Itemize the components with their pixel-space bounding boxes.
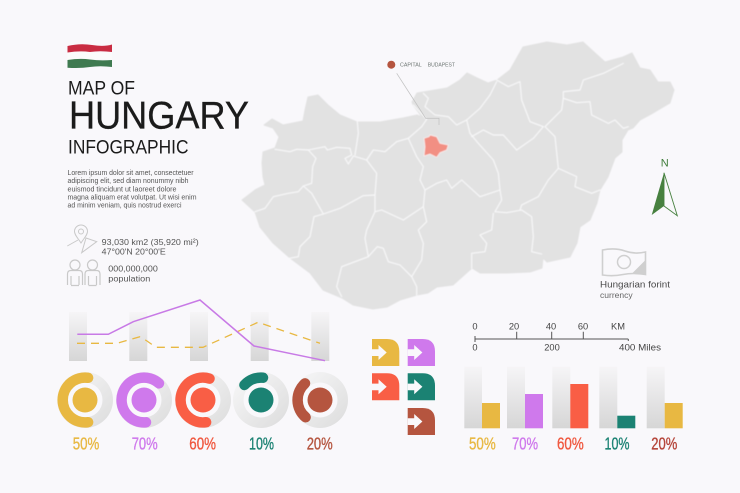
text block: lorem ipsum: adipiscing elit, sed diam nonummy nibh bbox=[68, 176, 188, 185]
chart columns bbox=[69, 312, 329, 361]
capital label bbox=[400, 62, 456, 68]
scale bar: 60 bbox=[578, 322, 588, 332]
dashed yellow series bbox=[77, 322, 320, 347]
donut 70% bbox=[116, 372, 172, 454]
arrow yellow bbox=[372, 339, 399, 366]
title: MAP OF bbox=[68, 78, 135, 100]
title bbox=[68, 78, 249, 158]
text: area and coordinates bbox=[102, 237, 199, 257]
donut charts bbox=[57, 372, 348, 454]
donut 10%: 10% bbox=[249, 434, 274, 454]
text: population bbox=[108, 264, 158, 284]
arrow purple bbox=[408, 339, 435, 366]
bar 50% bbox=[464, 367, 500, 454]
donut 50%: 50% bbox=[73, 434, 100, 454]
scale bar: 0 bbox=[472, 342, 478, 352]
donut 10% bbox=[233, 372, 289, 454]
text: area and coordinates: 47°00'N 20°00'E bbox=[102, 247, 166, 257]
text: population: population bbox=[108, 274, 151, 284]
line chart bbox=[69, 300, 329, 361]
north arrow bbox=[652, 158, 677, 216]
text block: lorem ipsum: Lorem ipsum dolor sit amet, consectetuer bbox=[68, 168, 194, 177]
purple series bbox=[77, 300, 325, 361]
county borders east bbox=[497, 63, 628, 210]
text block: lorem ipsum: magna aliquam erat volutpat. Ut wisi enim bbox=[68, 193, 196, 202]
scale bar: 0 bbox=[472, 322, 478, 332]
bar 10%: 10% bbox=[604, 434, 630, 454]
text: area and coordinates: 93,030 km2 (35,920 mi²) bbox=[102, 237, 199, 247]
scale bar bbox=[472, 322, 661, 352]
donut 60% bbox=[175, 372, 231, 454]
donut 70%: 70% bbox=[132, 434, 158, 454]
capital dot bbox=[387, 61, 395, 69]
text: currency: Hungarian forint bbox=[600, 280, 670, 291]
icon: people bbox=[68, 260, 100, 286]
bar 60%: 60% bbox=[557, 434, 584, 454]
bar 50%: 50% bbox=[469, 434, 496, 454]
donut 60%: 60% bbox=[189, 434, 216, 454]
capital label: BUDAPEST bbox=[428, 62, 456, 68]
bar 60% bbox=[552, 367, 588, 454]
bar chart bbox=[464, 367, 683, 454]
bar 70% bbox=[507, 367, 543, 454]
text: currency bbox=[600, 280, 670, 300]
donut 20% bbox=[292, 372, 348, 454]
text: population: 000,000,000 bbox=[108, 264, 158, 274]
bar 20% bbox=[647, 367, 683, 454]
capital callout bbox=[387, 61, 456, 125]
bar 20%: 20% bbox=[651, 434, 677, 454]
text block: lorem ipsum: ad minim veniam, quis nostrud exerci bbox=[68, 201, 182, 210]
county borders west and centre bbox=[255, 82, 542, 297]
scale bar: 400 Miles bbox=[619, 342, 661, 352]
arrow brown bbox=[408, 408, 435, 435]
donut 20%: 20% bbox=[307, 434, 333, 454]
arrow teal bbox=[408, 373, 435, 400]
north arrow: N bbox=[661, 158, 669, 170]
map outline bbox=[242, 42, 674, 309]
text block: lorem ipsum: euismod tincidunt ut laoreet dolore bbox=[68, 184, 176, 193]
bar 70%: 70% bbox=[512, 434, 538, 454]
scale bar: 20 bbox=[509, 322, 519, 332]
title: INFOGRAPHIC bbox=[68, 136, 188, 158]
icon: location pin on map bbox=[67, 225, 97, 253]
scale bar: 40 bbox=[546, 322, 556, 332]
icon: currency banknote bbox=[602, 249, 646, 276]
scale bar: KM bbox=[611, 322, 625, 332]
bar 10% bbox=[599, 367, 635, 454]
arrow icons bbox=[372, 339, 435, 435]
title: HUNGARY bbox=[69, 94, 249, 138]
text: currency: currency bbox=[600, 290, 633, 300]
map of Hungary bbox=[242, 42, 674, 309]
leader line bbox=[397, 73, 439, 125]
icon: Hungarian flag bbox=[68, 44, 112, 68]
capital label: CAPITAL bbox=[400, 62, 422, 68]
text block: lorem ipsum bbox=[68, 168, 196, 210]
scale bar: 200 bbox=[544, 342, 560, 352]
donut 50% bbox=[57, 372, 113, 454]
arrow red bbox=[372, 373, 399, 400]
Budapest highlight bbox=[424, 135, 448, 157]
